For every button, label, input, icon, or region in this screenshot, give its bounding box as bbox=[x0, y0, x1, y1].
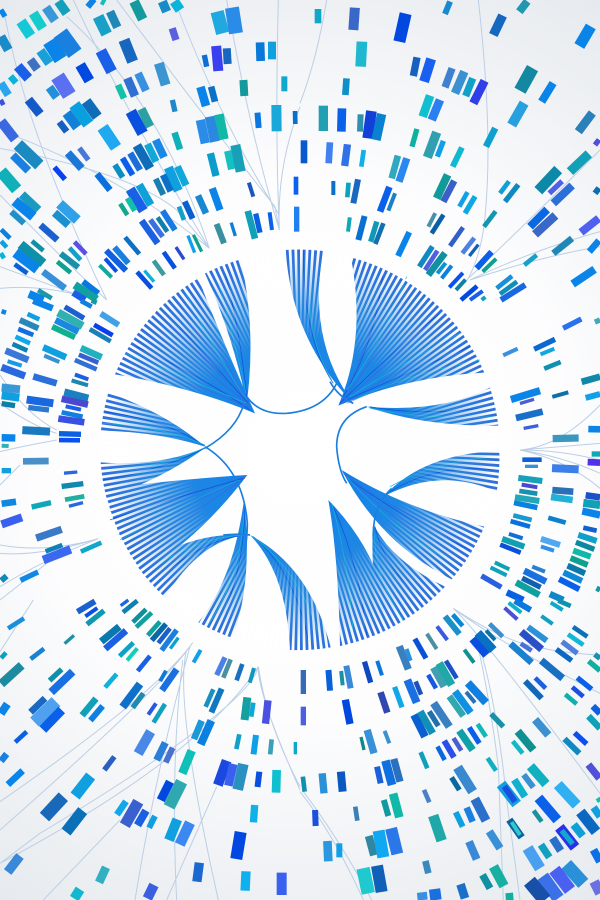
fan B: upper left narrow bbox=[205, 259, 251, 403]
fan H: lower right inner bbox=[372, 523, 445, 628]
data blocks: top-right sector bbox=[304, 0, 600, 300]
fan D: upper right big bbox=[338, 257, 484, 406]
strands: cyan curves bbox=[102, 250, 499, 649]
fan K: bottom left narrow bbox=[198, 500, 247, 638]
data blocks: bottom-left sector bbox=[0, 600, 295, 900]
data blocks: right sector bbox=[480, 319, 600, 600]
data blocks: bottom-right sector bbox=[303, 600, 600, 900]
data blocks: top-left sector bbox=[0, 0, 297, 300]
connectors: top-left bbox=[0, 0, 300, 300]
data blocks: left sector bbox=[0, 300, 119, 582]
fan O: left upper bbox=[101, 393, 205, 447]
fan E: right upper bbox=[367, 388, 498, 426]
connectors: top-right bbox=[300, 0, 600, 280]
fan F: right lower bbox=[383, 451, 499, 497]
connectors: right bbox=[520, 405, 600, 488]
fan N: left middle bbox=[101, 447, 207, 498]
fan C: top bbox=[286, 250, 353, 403]
strands: accent curves bbox=[103, 250, 498, 649]
chord diagram bbox=[101, 250, 499, 650]
radial stripes: fine lines fading in toward the rim of the fans bbox=[145, 295, 455, 605]
fan A: upper left bbox=[115, 278, 255, 413]
fan L: lower left bbox=[138, 535, 247, 597]
chord tails bbox=[205, 382, 392, 627]
chord fans bbox=[101, 250, 499, 650]
connectors: bottom-left bbox=[0, 600, 300, 900]
fan M: left lower big bbox=[105, 475, 247, 573]
connectors: bottom-right bbox=[300, 608, 600, 900]
fan G: lower right bbox=[342, 470, 484, 579]
fan J: bottom bbox=[250, 535, 331, 650]
connectors: left bbox=[0, 375, 98, 600]
strands: indigo curves on the large fans bbox=[110, 269, 477, 562]
fan I: bottom right bbox=[328, 500, 390, 646]
